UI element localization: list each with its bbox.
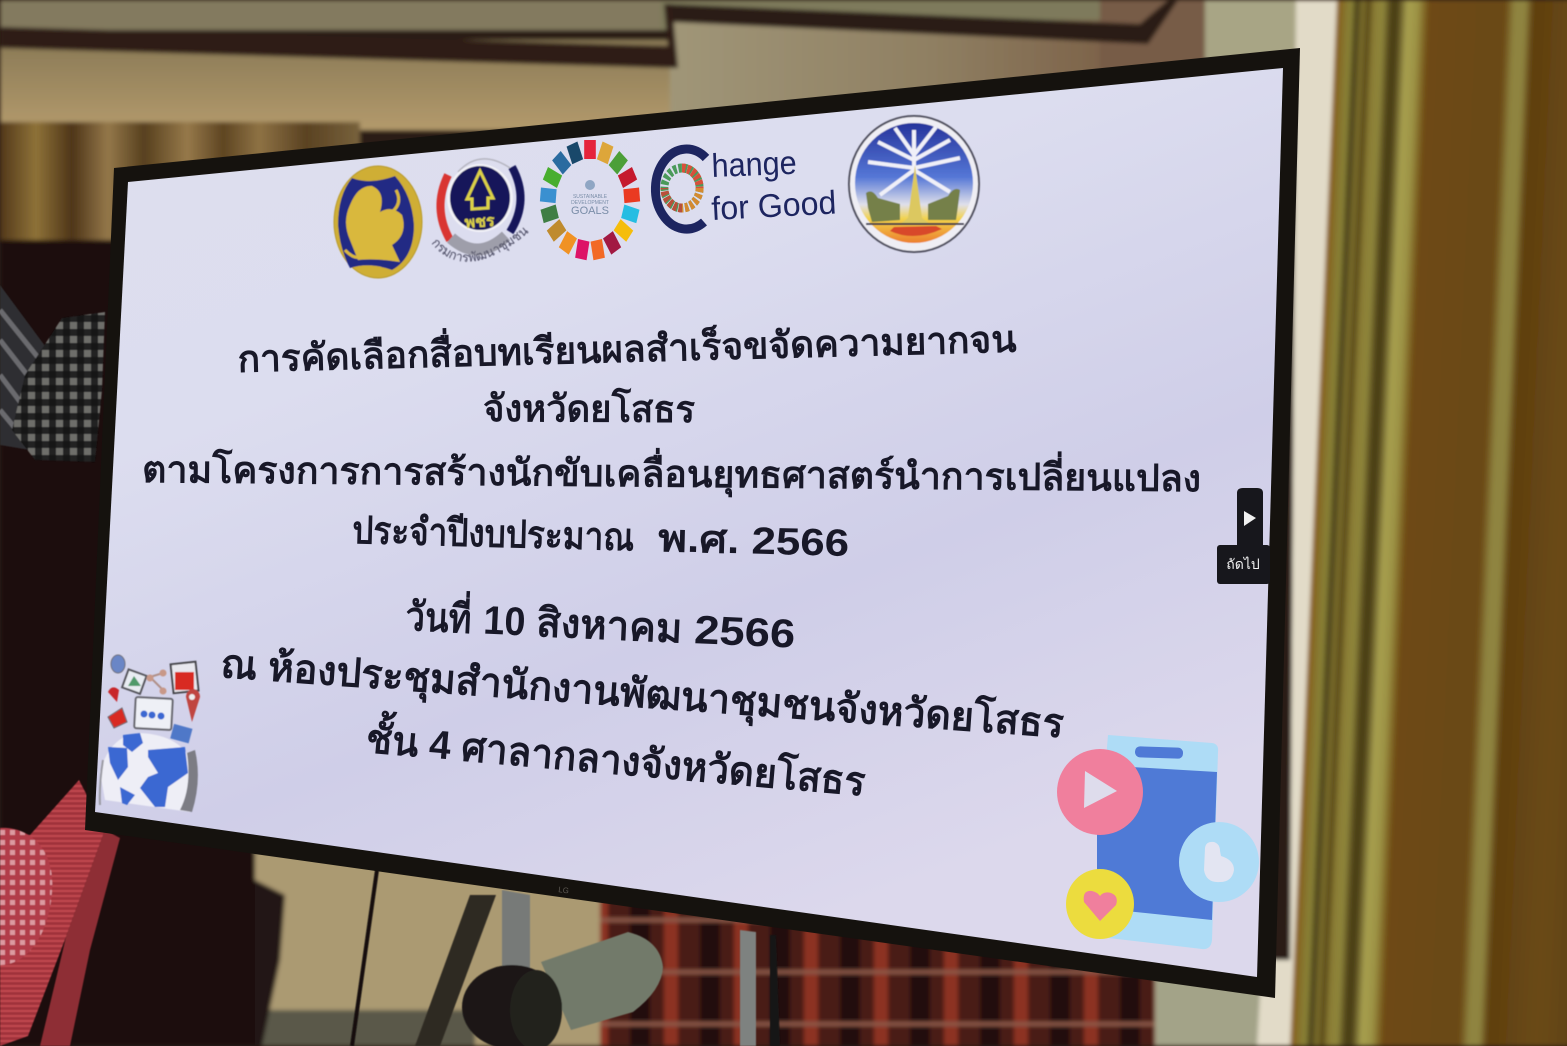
logo: Community Development Department: กรมการพัฒนาชุมชน [431, 227, 529, 262]
logo: Change for Good: for Good [710, 183, 837, 227]
logo: Sustainable Development Goals wheel: SUSTAINABLE [573, 194, 608, 200]
TV frame [85, 48, 1300, 998]
date line [405, 588, 796, 657]
logo: Community Development Department: พชร [464, 213, 496, 232]
slide text [142, 313, 1201, 805]
logo: Change for Good [655, 144, 837, 229]
logo: Thai government lion seal [334, 166, 422, 278]
illustration: phone with media icons [1057, 735, 1259, 949]
date line: 10 [483, 599, 526, 644]
venue line 1: ณ ห้องประชุมสำนักงานพัฒนาชุมชนจังหวัดยโสธร [219, 640, 1066, 749]
title line 4: fiscal year: พ.ศ. 2566 [658, 518, 850, 565]
title line 3: ตามโครงการการสร้างนักขับเคลื่อนยุทธศาสตร์นำการเปลี่ยนแปลง [142, 443, 1201, 502]
date line: วันที่ [405, 588, 473, 642]
title line 1: การคัดเลือกสื่อบทเรียนผลสำเร็จขจัดความยากจน [237, 313, 1017, 380]
venue line 2: ชั้น 4 ศาลากลางจังหวัดยโสธร [364, 709, 868, 805]
logo: Sustainable Development Goals wheel: DEVELOPMENT [571, 200, 609, 206]
logo: Yasothon province seal [849, 116, 979, 252]
red scarf lower left [0, 780, 120, 1046]
TV screen [95, 68, 1283, 977]
LG brand mark on bezel: LG [558, 885, 570, 895]
next button overlay: ถัดไป [1226, 556, 1260, 572]
next button overlay [1217, 488, 1270, 584]
date line: 2566 [693, 608, 796, 657]
logo: Sustainable Development Goals wheel [540, 140, 640, 260]
title line 4: fiscal year: ประจำปีงบประมาณ [352, 510, 635, 559]
title line 2: จังหวัดยโสธร [483, 386, 695, 430]
date line: สิงหาคม [535, 601, 683, 652]
logo: Sustainable Development Goals wheel: GOALS [571, 205, 609, 217]
tripod legs and camera [352, 870, 780, 1046]
illustration: social media globe [100, 655, 200, 812]
scarf decoration upper left [0, 285, 105, 462]
title line 4: fiscal year [352, 510, 850, 565]
logo: Community Development Department [431, 158, 529, 262]
logo: Change for Good: hange [711, 144, 797, 184]
